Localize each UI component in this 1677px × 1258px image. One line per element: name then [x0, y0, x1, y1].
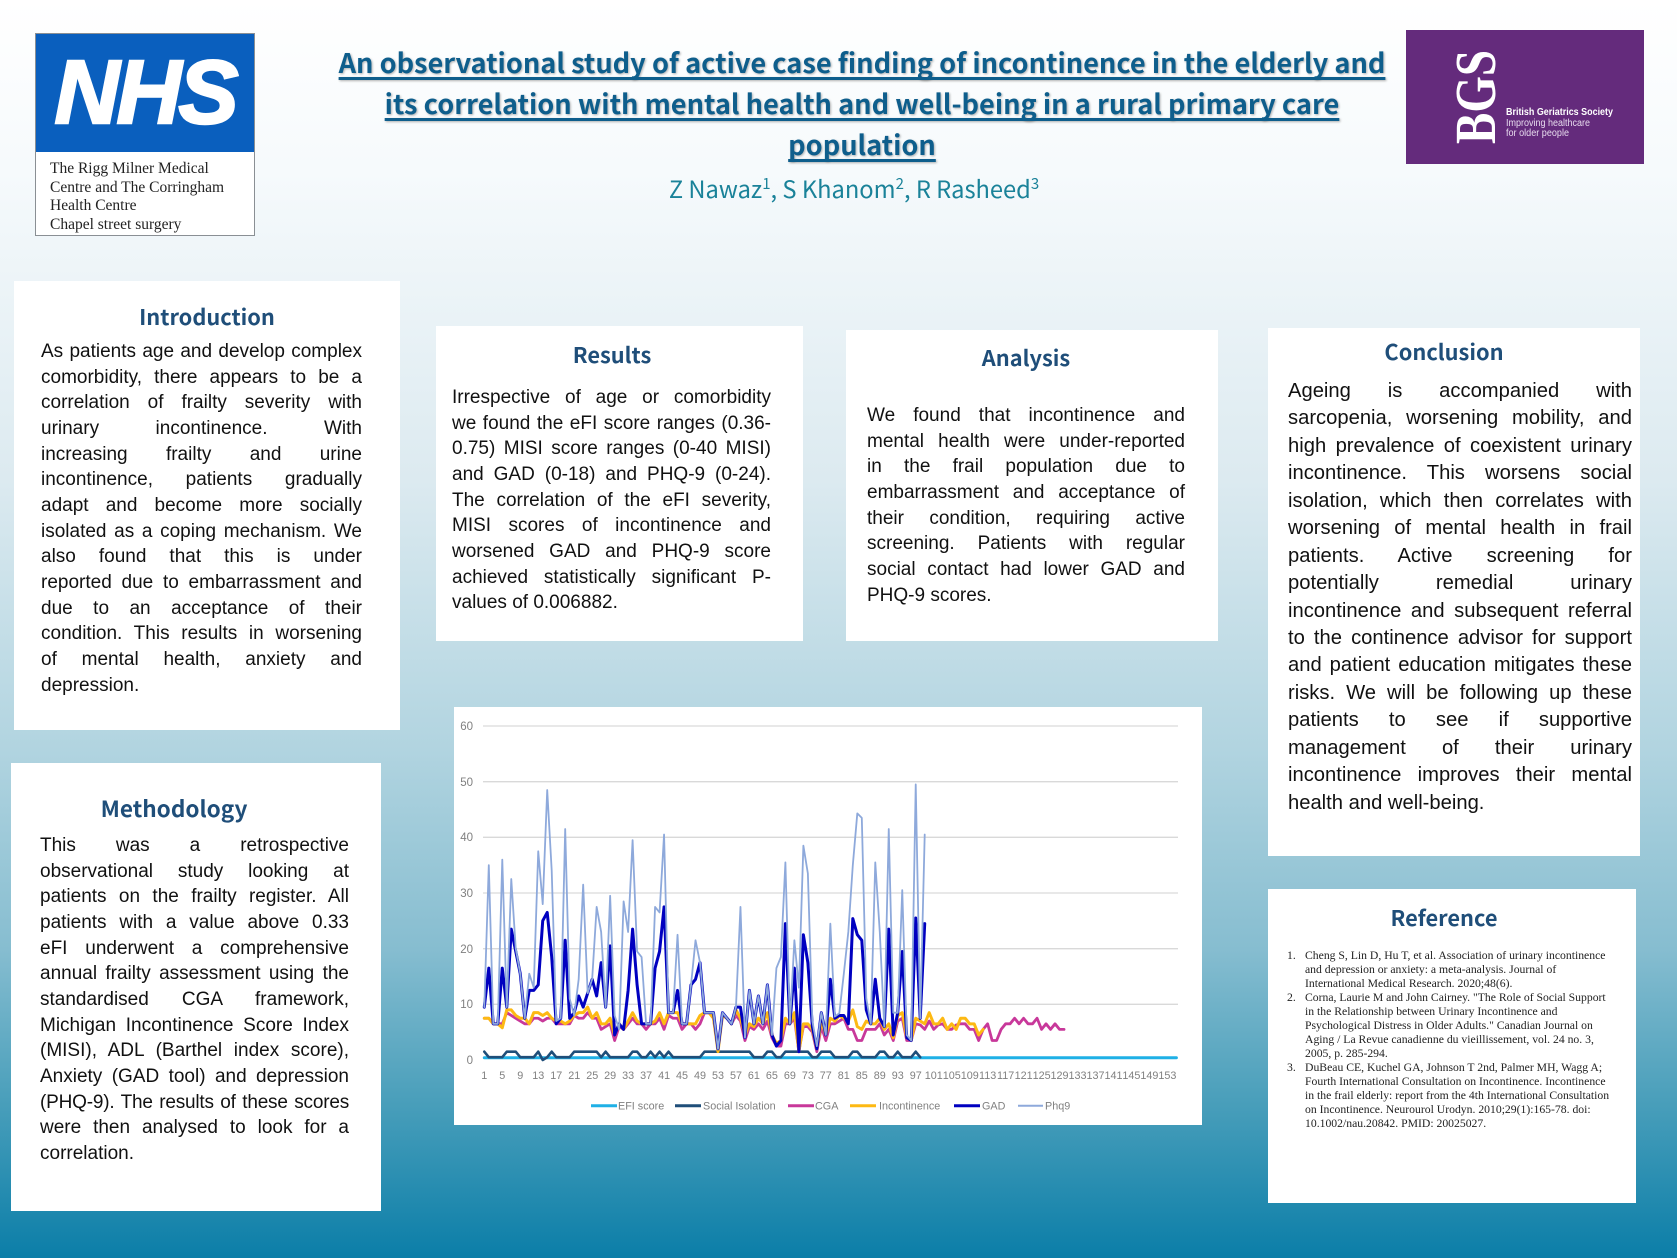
- x axis labels: 17: [550, 1070, 562, 1082]
- text: methodology: were then analysed to look for a: [40, 1117, 349, 1138]
- text: introduction: depression.: [41, 675, 139, 696]
- text: conclusion: management of their urinary: [1288, 737, 1632, 759]
- heading: reference: Reference: [1390, 902, 1498, 933]
- x axis labels: 53: [712, 1070, 724, 1082]
- x axis labels: 21: [568, 1070, 580, 1082]
- heading: conclusion: Conclusion: [1384, 336, 1504, 367]
- text: conclusion: high prevalence of coexistent urinary: [1288, 435, 1632, 457]
- text: introduction: As patients age and develop complex: [41, 341, 362, 362]
- heading: methodology: Methodology: [101, 791, 247, 824]
- text: methodology: standardised CGA framework,: [40, 989, 349, 1010]
- text: introduction: due to an acceptance of their: [41, 598, 362, 619]
- text: analysis: social contact had lower GAD and: [867, 559, 1185, 580]
- reference list: in the frail elderly: report from the 4th International Consultation: [1305, 1089, 1609, 1102]
- x axis labels: 1: [481, 1070, 487, 1082]
- x axis labels: 109: [961, 1070, 979, 1082]
- legend: [591, 1100, 1070, 1112]
- text: introduction: adapt and become more socially: [41, 495, 362, 516]
- y axis labels: 10: [460, 999, 473, 1011]
- line chart: [460, 721, 1178, 1112]
- reference list: 3.: [1287, 1061, 1296, 1074]
- text: results: 0.75) MISI score ranges (0-40 MISI): [452, 438, 771, 459]
- reference list: Corna, Laurie M and John Cairney. "The Role of Social Support: [1305, 991, 1606, 1004]
- logo: British Geriatrics Society: British Geriatrics Society: [1506, 107, 1613, 118]
- logo: NHS blue block: NHS: [54, 43, 236, 143]
- x axis labels: 141: [1104, 1070, 1123, 1082]
- x axis labels: 29: [604, 1070, 616, 1082]
- x axis labels: 73: [802, 1070, 814, 1082]
- title: its correlation with mental health and well-being in a rural primary care: [385, 82, 1339, 122]
- x axis labels: 97: [910, 1070, 922, 1082]
- text: analysis: mental health were under-reported: [867, 431, 1185, 452]
- text: introduction: also found that this is under: [41, 546, 362, 567]
- x axis labels: 77: [820, 1070, 832, 1082]
- reference list: on Incontinence. Neurourol Urodyn. 2010;29(1):165-78. doi:: [1305, 1103, 1591, 1116]
- y axis labels: 50: [460, 777, 473, 789]
- x axis labels: 37: [640, 1070, 652, 1082]
- x axis labels: 153: [1158, 1070, 1176, 1082]
- panel: conclusion: [1268, 328, 1640, 856]
- text: methodology: [40, 835, 349, 1164]
- text: methodology: correlation.: [40, 1143, 134, 1164]
- data series: [484, 784, 1176, 1060]
- practice names: The Rigg Milner Medical: [50, 160, 209, 177]
- reference list: DuBeau CE, Kuchel GA, Johnson T 2nd, Palmer MH, Wagg A;: [1305, 1061, 1602, 1074]
- logo: NHS: [35, 33, 255, 236]
- text: results: MISI scores of incontinence and: [452, 515, 771, 536]
- heading: introduction: Introduction: [139, 301, 275, 332]
- text: introduction: increasing frailty and urine: [41, 444, 362, 465]
- text: results: Irrespective of age or comorbidity: [452, 387, 771, 408]
- reference list: Psychological Distress in Older Adults." Canadian Journal on: [1305, 1019, 1593, 1032]
- text: methodology: This was a retrospective: [40, 835, 349, 856]
- x axis labels: 13: [532, 1070, 544, 1082]
- text: methodology: eFI underwent a comprehensive: [40, 938, 349, 959]
- x axis labels: 57: [730, 1070, 742, 1082]
- legend: Social Isolation: [703, 1100, 776, 1112]
- text: analysis: embarrassment and acceptance of: [867, 482, 1185, 503]
- text: results: The correlation of the eFI severity,: [452, 490, 771, 511]
- panel: analysis: [846, 330, 1218, 641]
- y axis labels: 60: [460, 721, 473, 733]
- x axis labels: 25: [586, 1070, 598, 1082]
- text: conclusion: to the continence advisor for support: [1288, 627, 1632, 649]
- series: CGA: [484, 1013, 1064, 1052]
- x axis labels: 137: [1086, 1070, 1105, 1082]
- series: Social Isolation: [484, 1052, 920, 1060]
- text: methodology: observational study looking at: [40, 861, 349, 882]
- x axis labels: 61: [748, 1070, 760, 1082]
- practice names: Centre and The Corringham: [50, 179, 224, 196]
- text: results: values of 0.006882.: [452, 592, 618, 613]
- title: [338, 41, 1388, 164]
- text: results: [452, 387, 771, 613]
- logo: British Geriatrics Society: Improving healthcare: [1506, 118, 1590, 129]
- text: analysis: [867, 405, 1186, 606]
- reference list: International Medical Research. 2020;48(6).: [1305, 977, 1512, 990]
- legend: Phq9: [1045, 1100, 1070, 1112]
- text: conclusion: potentially remedial urinary: [1288, 572, 1632, 594]
- reference list: 10.1002/nau.20842. PMID: 20025027.: [1305, 1117, 1486, 1130]
- title: An observational study of active case finding of incontinence in the elderly and: [339, 41, 1385, 81]
- panel: chart: [454, 707, 1202, 1125]
- practice names: Health Centre: [50, 197, 137, 214]
- y axis labels: 20: [460, 944, 473, 956]
- x axis labels: 85: [856, 1070, 868, 1082]
- text: conclusion: sarcopenia, worsening mobility, and: [1288, 407, 1632, 429]
- text: results: we found the eFI score ranges (0.36-: [452, 413, 771, 434]
- x axis labels: 117: [997, 1070, 1014, 1082]
- text: conclusion: incontinence and subsequent referral: [1288, 600, 1632, 622]
- reference list: 2005, p. 285-294.: [1305, 1047, 1388, 1060]
- x axis labels: 93: [892, 1070, 904, 1082]
- text: results: and GAD (0-18) and PHQ-9 (0-24).: [452, 464, 771, 485]
- text: introduction: comorbidity, there appears to be a: [41, 367, 362, 388]
- text: analysis: in the frail population due to: [867, 456, 1185, 477]
- title: population: [788, 123, 936, 163]
- series: Phq9: [484, 784, 925, 1049]
- x axis labels: 9: [517, 1070, 523, 1082]
- text: analysis: PHQ-9 scores.: [867, 585, 992, 606]
- x axis labels: 105: [943, 1070, 961, 1082]
- reference list: in the Relationship between Urinary Incontinence and: [1305, 1005, 1558, 1018]
- text: introduction: reported due to embarrassment and: [41, 572, 362, 593]
- legend: Incontinence: [879, 1100, 940, 1112]
- text: methodology: Anxiety (GAD tool) and depression: [40, 1066, 349, 1087]
- x axis labels: 101: [925, 1070, 943, 1082]
- series: GAD: [484, 907, 925, 1052]
- x axis labels: 129: [1050, 1070, 1069, 1082]
- x axis labels: 45: [676, 1070, 688, 1082]
- text: results: achieved statistically significant P-: [452, 567, 771, 588]
- text: introduction: incontinence, patients gradually: [41, 469, 362, 490]
- reference list: Aging / La Revue canadienne du vieillissement, vol. 24 no. 3,: [1305, 1033, 1594, 1046]
- y axis labels: 40: [460, 832, 473, 844]
- logo: British Geriatrics Society: BGS: [1443, 50, 1508, 144]
- x axis labels: 125: [1033, 1070, 1051, 1082]
- reference list: Cheng S, Lin D, Hu T, et al. Association of urinary incontinence: [1305, 949, 1605, 962]
- text: analysis: their condition, requiring active: [867, 508, 1185, 529]
- text: introduction: correlation of frailty severity with: [41, 392, 362, 413]
- x axis labels: 49: [694, 1070, 706, 1082]
- logo: British Geriatrics Society: [1406, 30, 1644, 164]
- panel: methodology: [11, 763, 381, 1211]
- legend: GAD: [982, 1100, 1006, 1112]
- text: conclusion: risks. We will be following up these: [1288, 682, 1632, 704]
- heading: analysis: Analysis: [982, 342, 1070, 373]
- x axis labels: 41: [658, 1070, 670, 1082]
- x axis labels: 113: [979, 1070, 996, 1082]
- x axis labels: 133: [1068, 1070, 1087, 1082]
- reference list: 2.: [1287, 991, 1296, 1004]
- y axis labels: 30: [460, 888, 473, 900]
- logo: British Geriatrics Society: for older people: [1506, 128, 1569, 139]
- authors: Z Nawaz1, S Khanom2, R Rasheed3: [669, 171, 1039, 205]
- text: methodology: Michigan Incontinence Score Index: [40, 1015, 349, 1036]
- panel: results: [436, 326, 803, 641]
- text: methodology: patients on the frailty register. All: [40, 886, 349, 907]
- y axis labels: 0: [467, 1055, 473, 1067]
- panel: introduction: [14, 281, 400, 730]
- x axis labels: 5: [499, 1070, 505, 1082]
- panel: reference: [1268, 889, 1636, 1203]
- heading: results: Results: [573, 339, 651, 370]
- reference list: and depression or anxiety: a meta-analysis. Journal of: [1305, 963, 1556, 976]
- text: analysis: We found that incontinence and: [867, 405, 1185, 426]
- text: introduction: condition. This results in worsening: [41, 623, 362, 644]
- series: EFI score: [484, 1056, 1176, 1059]
- y axis labels: [460, 721, 473, 1067]
- x axis labels: 149: [1140, 1070, 1158, 1082]
- text: conclusion: [1288, 380, 1632, 814]
- x axis labels: 81: [838, 1070, 850, 1082]
- text: methodology: annual frailty assessment using the: [40, 963, 349, 984]
- x axis labels: 33: [622, 1070, 634, 1082]
- x axis labels: 121: [1015, 1070, 1033, 1082]
- x axis labels: 69: [784, 1070, 796, 1082]
- text: introduction: of mental health, anxiety and: [41, 649, 362, 670]
- text: methodology: patients with a value above 0.33: [40, 912, 349, 933]
- text: conclusion: health and well-being.: [1288, 792, 1484, 814]
- text: conclusion: isolation, which then correlates with: [1288, 490, 1632, 512]
- reference list: 1.: [1287, 949, 1296, 962]
- x axis labels: [481, 1070, 1176, 1082]
- series: Incontinence: [484, 1007, 983, 1052]
- legend: EFI score: [618, 1100, 664, 1112]
- text: analysis: screening. Patients with regular: [867, 533, 1185, 554]
- legend: CGA: [815, 1100, 839, 1112]
- text: introduction: [41, 341, 362, 696]
- text: methodology: (PHQ-9). The results of these scores: [40, 1092, 349, 1113]
- text: introduction: isolated as a coping mechanism. We: [41, 521, 362, 542]
- reference list: Fourth International Consultation on Incontinence. Incontinence: [1305, 1075, 1606, 1088]
- x axis labels: 145: [1122, 1070, 1140, 1082]
- practice names: Chapel street surgery: [50, 216, 181, 233]
- text: conclusion: Ageing is accompanied with: [1288, 380, 1632, 402]
- text: methodology: (MISI), ADL (Barthel index score),: [40, 1040, 349, 1061]
- text: conclusion: patients to see if supportive: [1288, 709, 1632, 731]
- text: introduction: urinary incontinence. With: [41, 418, 362, 439]
- reference list: [1287, 949, 1609, 1130]
- x axis labels: 89: [874, 1070, 886, 1082]
- text: conclusion: worsening of mental health in frail: [1288, 517, 1632, 539]
- text: conclusion: incontinence improves their mental: [1288, 764, 1632, 786]
- text: results: worsened GAD and PHQ-9 score: [452, 541, 771, 562]
- practice names: [50, 160, 224, 233]
- text: conclusion: incontinence. This worsens social: [1288, 462, 1632, 484]
- text: conclusion: and patient education mitigates these: [1288, 654, 1632, 676]
- x axis labels: 65: [766, 1070, 778, 1082]
- text: conclusion: patients. Active screening for: [1288, 545, 1632, 567]
